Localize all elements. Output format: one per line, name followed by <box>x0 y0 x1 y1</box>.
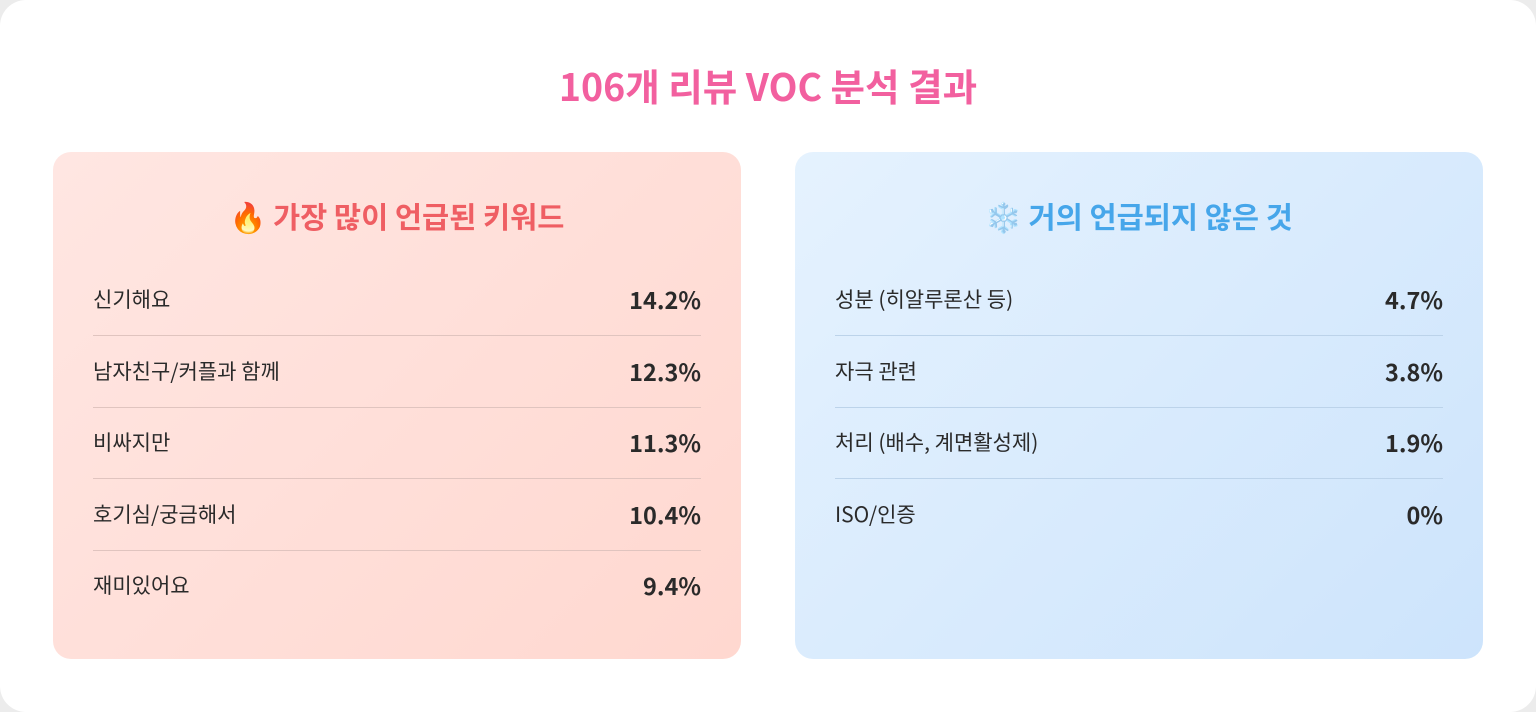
panel: most mentioned <box>53 152 741 659</box>
row: 남자친구 <box>93 336 701 408</box>
title: 106개 리뷰 VOC 분석 결과 <box>559 57 977 112</box>
row: 호기심: 10.4% <box>629 497 701 531</box>
row: 호기심 <box>93 479 701 551</box>
row: 신기해요: 14.2% <box>629 282 701 316</box>
row: 자극 <box>835 336 1443 408</box>
row: 자극: 3.8% <box>1385 354 1443 388</box>
panel: rarely mentioned <box>795 152 1483 659</box>
row: 호기심: 호기심/궁금해서 <box>93 499 236 529</box>
row: 처리 <box>835 407 1443 479</box>
row: 재미있어요: 재미있어요 <box>93 570 190 600</box>
row: 신기해요: 신기해요 <box>93 284 170 314</box>
row: 처리: 처리 (배수, 계면활성제) <box>835 427 1038 457</box>
row: 비싸지만: 11.3% <box>629 425 701 459</box>
row: 성분: 성분 (히알루론산 등) <box>835 284 1013 314</box>
row: 재미있어요 <box>93 568 701 602</box>
row: 자극: 자극 관련 <box>835 356 917 386</box>
row: 처리: 1.9% <box>1385 425 1443 459</box>
row: ISO <box>835 497 1443 531</box>
row: 성분 <box>835 264 1443 336</box>
row: 성분: 4.7% <box>1385 282 1443 316</box>
heading: most mentioned keywords: 🔥 가장 많이 언급된 키워드 <box>230 195 564 237</box>
row: 재미있어요: 9.4% <box>643 568 701 602</box>
row: 비싸지만: 비싸지만 <box>93 427 170 457</box>
heading: rarely mentioned: ❄️ 거의 언급되지 않은 것 <box>985 195 1293 237</box>
row: 신기해요 <box>93 264 701 336</box>
row: 비싸지만 <box>93 407 701 479</box>
row: 남자친구: 12.3% <box>629 354 701 388</box>
row: ISO: ISO/인증 <box>835 499 916 529</box>
row: 남자친구: 남자친구/커플과 함께 <box>93 356 280 386</box>
row: ISO: 0% <box>1406 497 1443 531</box>
